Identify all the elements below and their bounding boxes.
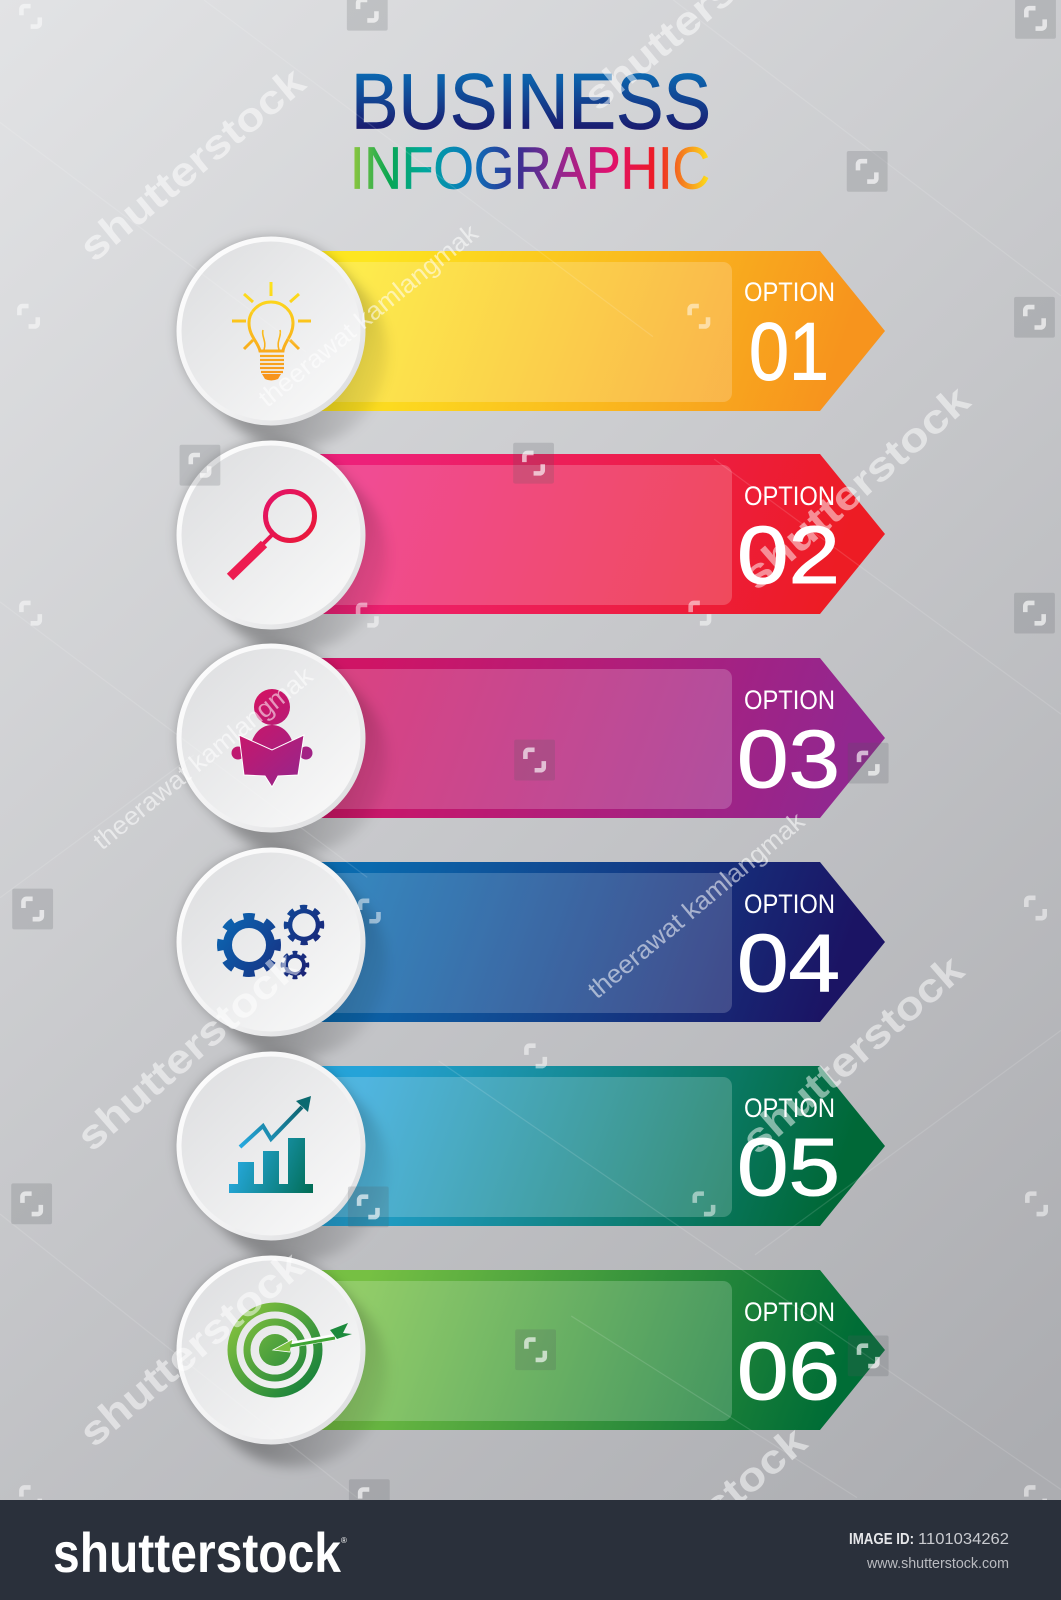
footer image id label: IMAGE ID: — [849, 1531, 914, 1548]
watermarks: shutterstock — [733, 946, 973, 1163]
watermarks: theerawat kamlangmak — [583, 807, 810, 1004]
footer registered mark: ® — [341, 1536, 347, 1545]
banner 03 — [300, 658, 885, 818]
watermarks: theerawat kamlangmak — [253, 219, 484, 413]
panel: option 05 — [176, 1052, 885, 1240]
disc 06 — [176, 1256, 366, 1444]
banner 03: OPTION — [744, 685, 835, 715]
footer logo: shutterstock — [53, 1521, 342, 1584]
icon: target with arrow — [232, 1307, 352, 1393]
disc 02 — [176, 440, 366, 630]
banner 02: 02 — [737, 510, 840, 601]
banner 06: OPTION — [744, 1297, 835, 1327]
disc 05 — [176, 1052, 366, 1240]
icon: gears — [220, 907, 322, 978]
banner 06 — [300, 1270, 885, 1430]
panel: option 04 — [176, 848, 885, 1036]
icon: growth chart — [229, 1096, 313, 1193]
banner 02 — [300, 454, 885, 614]
banner 05 — [300, 1066, 885, 1226]
title line: business: BUSINESS — [351, 56, 711, 146]
banner 01: 01 — [749, 306, 829, 398]
footer bar — [0, 1500, 1061, 1600]
title — [350, 56, 711, 202]
watermarks: shutterstock — [68, 943, 307, 1160]
panel: option 06 — [176, 1256, 885, 1444]
banner 05: 05 — [737, 1122, 840, 1213]
disc 04 — [176, 848, 366, 1036]
watermarks: shutterstock — [733, 376, 979, 599]
panel: option 03 — [176, 644, 885, 832]
banner 04 — [300, 862, 885, 1022]
title line: infographic: INFOGRAPHIC — [350, 136, 710, 202]
footer image id number: 1101034262 — [918, 1531, 1009, 1548]
disc 01 — [176, 236, 366, 426]
footer url: www.shutterstock.com — [866, 1556, 1009, 1572]
watermarks: shutterstock — [70, 1242, 312, 1456]
panel: option 01 — [176, 236, 885, 426]
icon: person reading — [232, 689, 312, 787]
watermarks: shutterstock — [70, 58, 314, 270]
panel: option 02 — [176, 440, 885, 630]
banner 02: OPTION — [744, 481, 835, 511]
icon: light bulb — [232, 282, 311, 380]
disc 03 — [176, 644, 366, 832]
banner 06: 06 — [737, 1326, 840, 1417]
banner 04: OPTION — [744, 889, 835, 919]
banner 01: OPTION — [744, 277, 835, 307]
banner 03: 03 — [737, 714, 840, 805]
banner 01 — [300, 251, 885, 411]
banner 05: OPTION — [744, 1093, 835, 1123]
banner 04: 04 — [737, 918, 840, 1009]
watermarks: theerawat kamlangmak — [88, 662, 318, 856]
icon: magnifying glass — [230, 492, 314, 577]
